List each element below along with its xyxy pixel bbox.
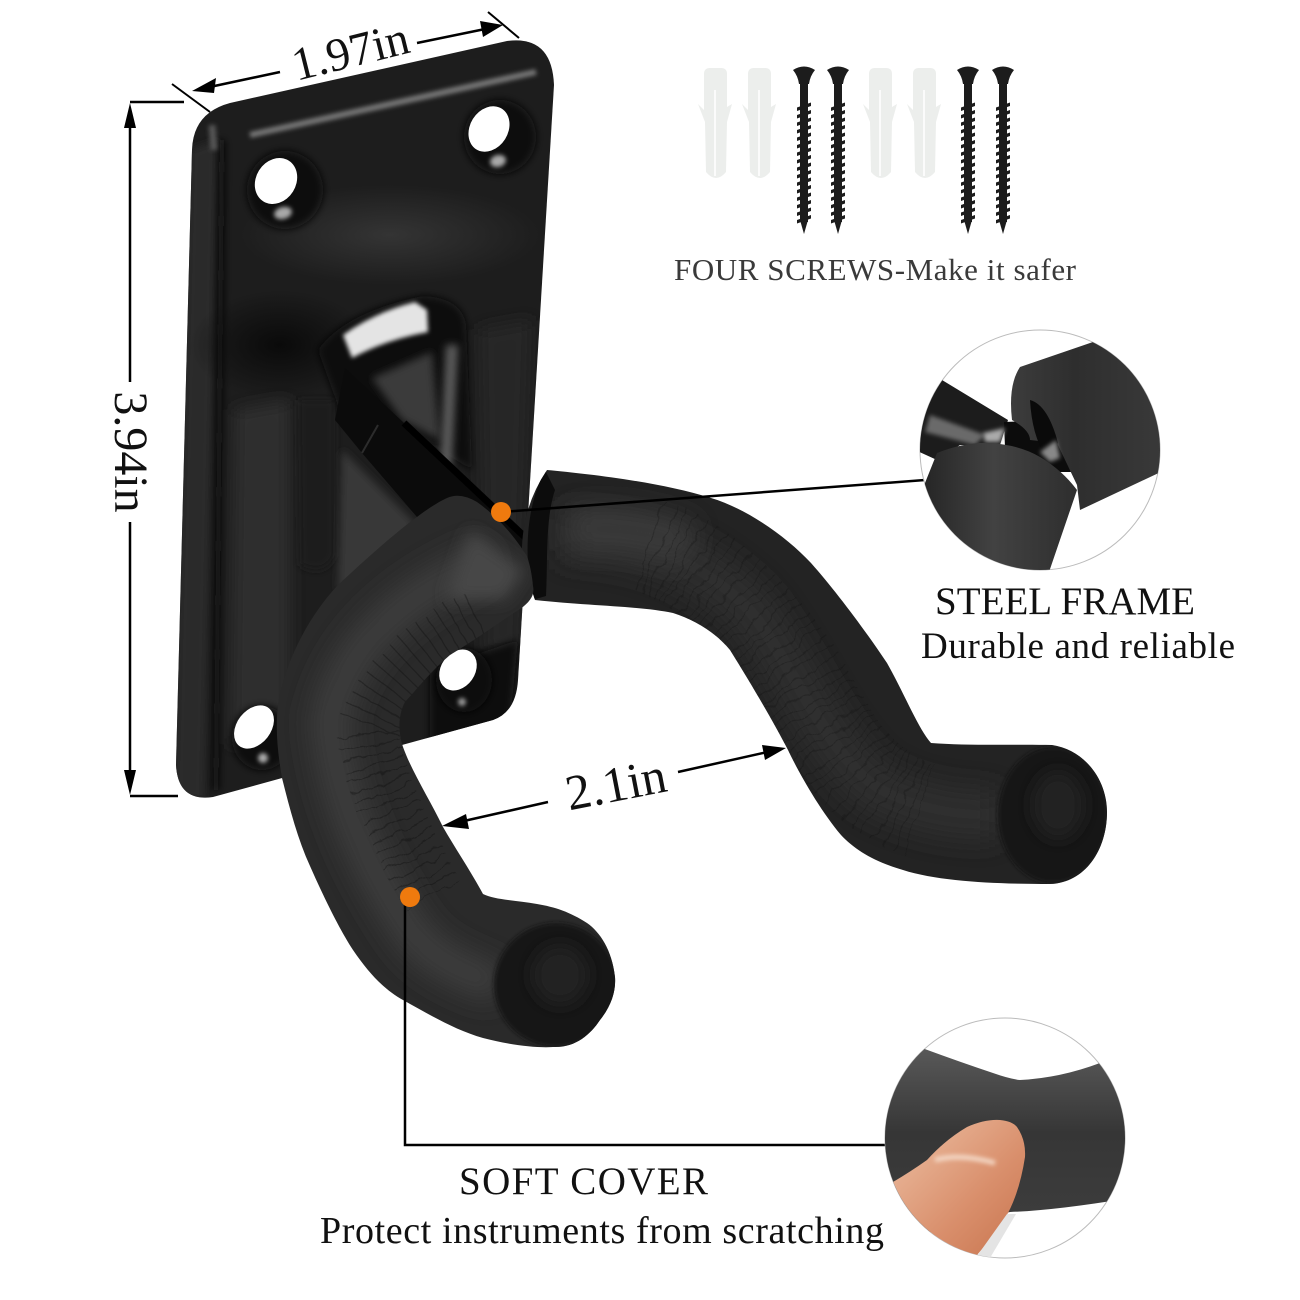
dimension: plate height 3.94in — [104, 102, 184, 796]
mounting hole top left — [246, 150, 323, 229]
inset: soft cover being pressed — [880, 1018, 1135, 1258]
screw 3 — [957, 66, 979, 234]
screws and wall anchors set — [698, 66, 1014, 234]
padded arm, right — [522, 470, 1108, 884]
screw 4 — [992, 66, 1014, 234]
dimension: arm gap 2.1in — [442, 745, 786, 829]
caption: steel frame — [921, 580, 1235, 667]
wall anchor 4 — [907, 68, 941, 178]
inset: steel frame detail — [915, 330, 1170, 575]
callout leader: soft cover — [400, 887, 886, 1145]
caption: four screws: FOUR SCREWS-Make it safer — [674, 252, 1077, 287]
soft cover title: SOFT COVER — [459, 1160, 708, 1203]
wall anchor 1 — [698, 68, 732, 178]
caption: soft cover — [320, 1160, 884, 1252]
label 2.1in: 2.1in — [561, 747, 671, 821]
steel rod — [335, 368, 545, 575]
mounting hole bottom left — [226, 698, 292, 770]
orange dot — [400, 887, 420, 907]
steel frame description: Durable and reliable — [921, 626, 1235, 667]
callout leader: steel frame — [491, 480, 925, 522]
screw 2 — [827, 66, 849, 234]
soft cover description: Protect instruments from scratching — [320, 1210, 884, 1252]
mounting hole bottom right — [431, 642, 492, 712]
label 3.94in: 3.94in — [104, 391, 157, 513]
label 1.97in: 1.97in — [287, 12, 414, 92]
screw 1 — [793, 66, 815, 234]
white highlight on boss — [343, 302, 428, 358]
wall anchor 2 — [742, 68, 776, 178]
dimension: plate width 1.97in — [172, 12, 519, 112]
steel frame title: STEEL FRAME — [935, 580, 1195, 623]
orange dot — [491, 502, 511, 522]
wall anchor 3 — [863, 68, 897, 178]
mounting hole top right — [460, 99, 536, 174]
wall plate bracket — [174, 40, 554, 800]
padded arm, left — [277, 496, 618, 1047]
